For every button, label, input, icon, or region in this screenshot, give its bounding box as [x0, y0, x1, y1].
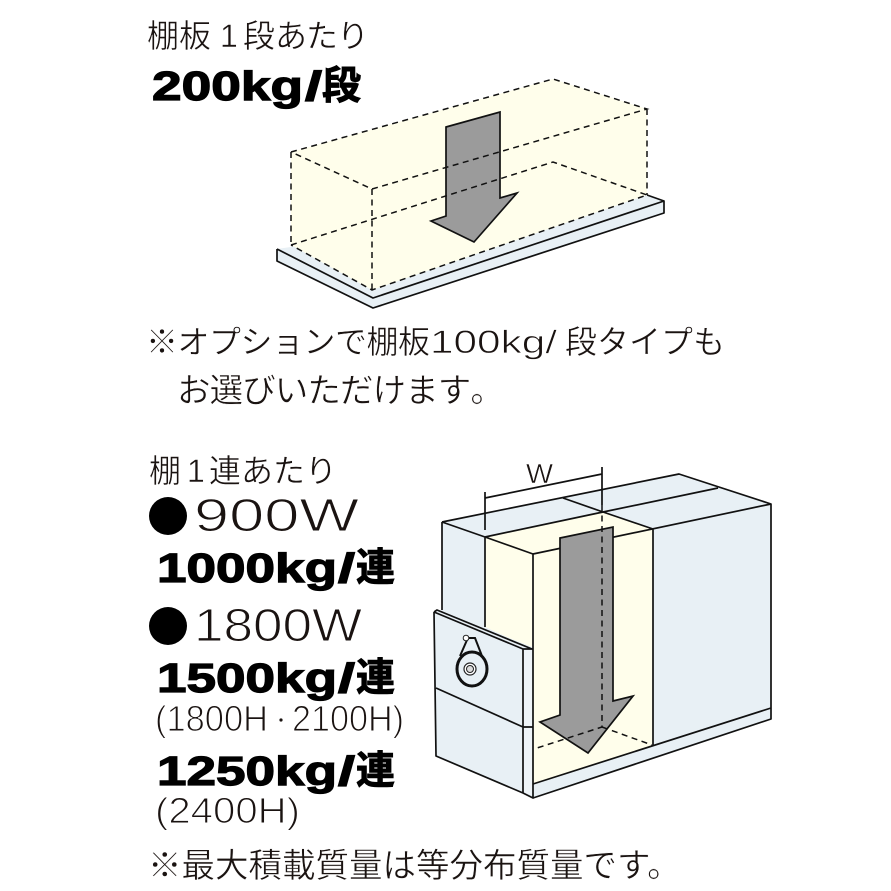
value: 200kg per shelf: / [305, 63, 322, 109]
width dimension: W [526, 458, 554, 489]
icon: lock [457, 635, 487, 686]
value: 1250kg per bay [157, 748, 395, 794]
note: optional shelf type: お選びいただけます。 [177, 373, 504, 410]
note: optional shelf type: 100kg/ [430, 324, 557, 360]
note: 2400H: (2400H) [155, 790, 300, 831]
value: 200kg per shelf [152, 63, 361, 109]
value: 200kg per shelf: 200kg [152, 63, 303, 109]
value: 1000kg per bay: 1000kg [157, 545, 337, 591]
heading: per shelf bay: 棚1連あたり [149, 453, 337, 489]
label: 900W: 900W [194, 489, 360, 541]
value: 1000kg per bay: / [338, 545, 355, 591]
note: 1800H and 2100H: 2100H) [292, 698, 404, 739]
value: 1000kg per bay: 連 [356, 547, 395, 590]
note: optional shelf type [146, 324, 725, 410]
value: 1250kg per bay: 1250kg [157, 748, 337, 794]
note: uniform load: ※最大積載質量は等分布質量です。 [148, 848, 681, 885]
value: 1500kg per bay: 1500kg [157, 655, 337, 701]
value: 1250kg per bay: 連 [356, 750, 395, 793]
door panel [434, 610, 533, 798]
width dimension [485, 458, 602, 530]
diagram: cabinet load [434, 458, 771, 798]
value: 1500kg per bay: 連 [356, 657, 395, 700]
note: optional shelf type: ※オプションで棚板 [146, 324, 430, 360]
value: 1250kg per bay: / [338, 748, 355, 794]
load volume [291, 79, 647, 290]
value: 200kg per shelf: 段 [322, 65, 361, 108]
diagram: shelf load [277, 79, 664, 308]
icon: down arrow [431, 112, 517, 242]
value: 1500kg per bay [157, 655, 395, 701]
note: optional shelf type: 段タイプも [565, 324, 725, 360]
value: 1500kg per bay: / [338, 655, 355, 701]
heading: per shelf board: 棚板1段あたり [147, 18, 369, 54]
label: 900W [149, 489, 360, 541]
value: 1000kg per bay [157, 545, 395, 591]
cabinet body [436, 474, 771, 798]
label: 1800W [149, 599, 363, 651]
icon: down arrow [540, 527, 633, 753]
label: 1800W: 1800W [194, 599, 363, 651]
shelf board [277, 195, 664, 308]
note: 1800H and 2100H [155, 698, 404, 739]
load volume dashed outline [291, 79, 647, 290]
hidden edges [537, 505, 652, 748]
note: 1800H and 2100H: (1800H [155, 698, 268, 739]
